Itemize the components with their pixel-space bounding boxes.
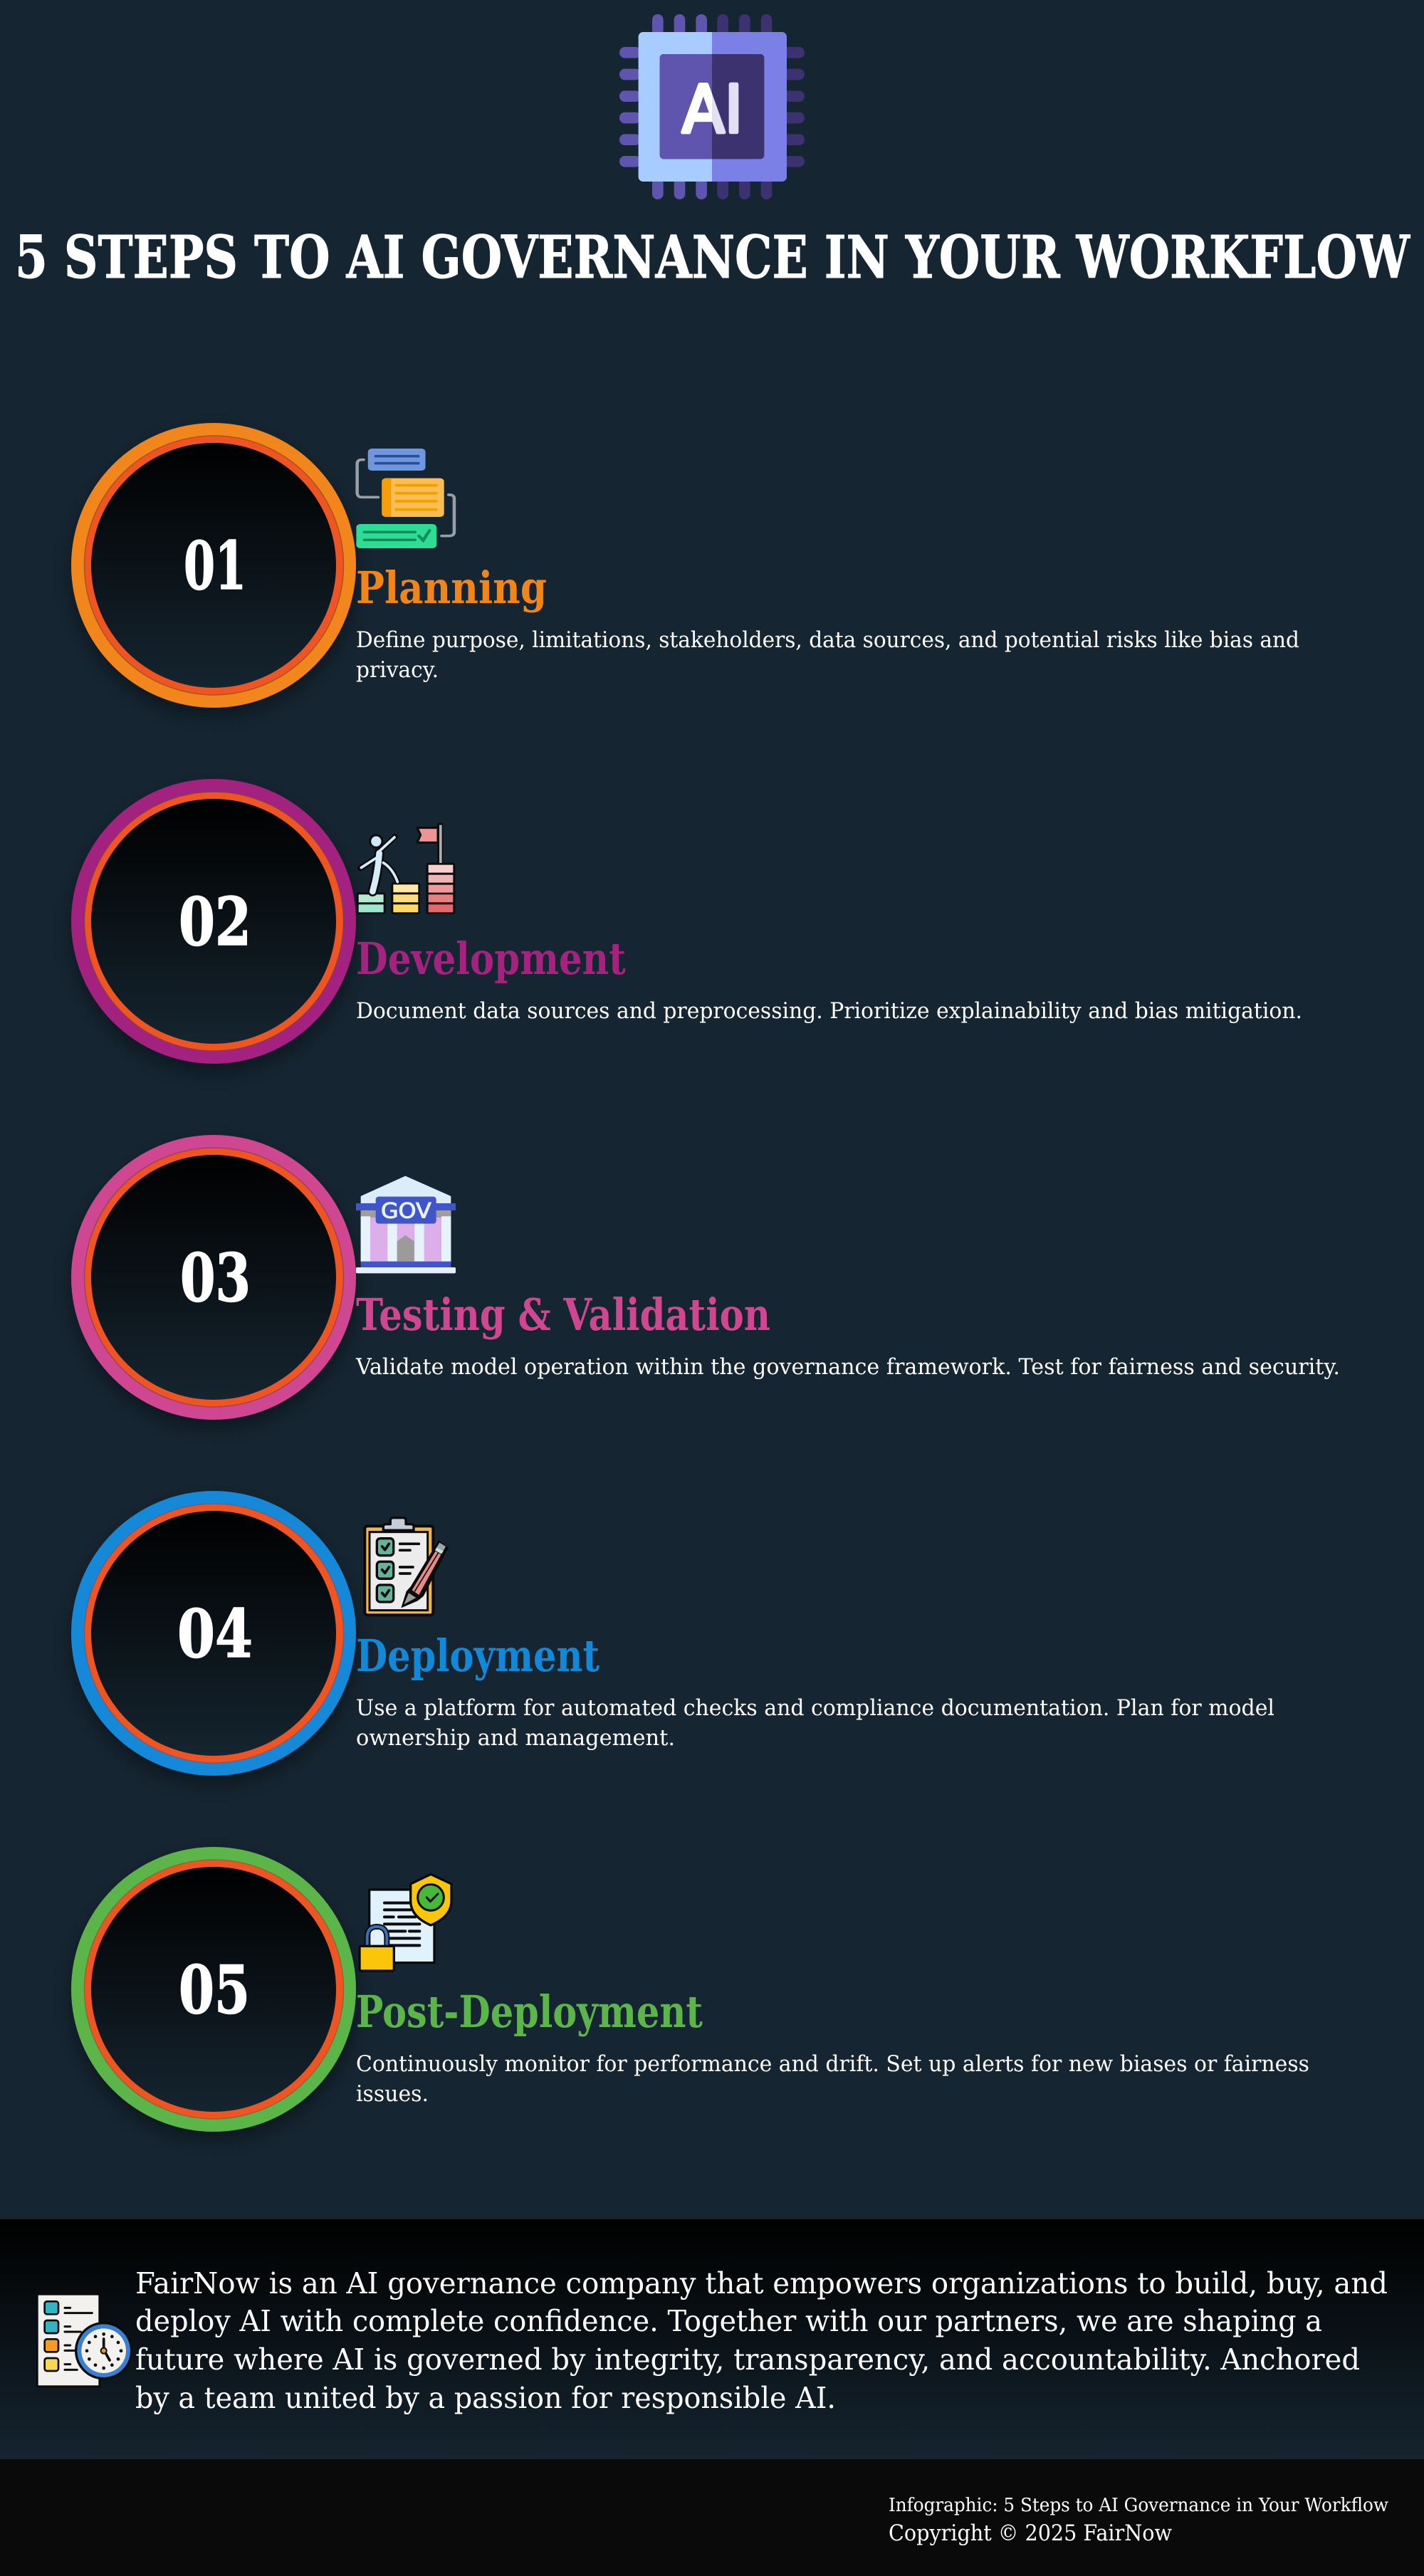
- copyright: Copyright © 2025 FairNow: [889, 2520, 1172, 2546]
- step 4: deployment: [71, 1491, 1274, 1776]
- number badge 02: 02: [179, 883, 251, 960]
- step 5: post-deployment: [71, 1847, 1309, 2132]
- icon: AI chip: [619, 14, 805, 199]
- icon: government building: GOV: [381, 1199, 431, 1223]
- heading: testing and validation: Testing & Validation: [356, 1289, 770, 1341]
- description: post-deployment: [356, 2051, 1309, 2107]
- description: planning: Define purpose, limitations, stakeholders, data sources, and potential risks like bias and: [356, 627, 1299, 653]
- number badge 03: 03: [180, 1239, 251, 1316]
- about text: [135, 2266, 1388, 2415]
- about text: FairNow is an AI governance company that empowers organizations to build, buy, and: [135, 2266, 1388, 2300]
- about text: deploy AI with complete confidence. Together with our partners, we are shaping a: [135, 2304, 1322, 2338]
- description: deployment: Use a platform for automated checks and compliance documentation. Plan for model: [356, 1695, 1274, 1721]
- icon: workflow cards: [356, 449, 454, 548]
- number badge 05: 05: [179, 1951, 250, 2028]
- heading: post-deployment: Post-Deployment: [356, 1986, 703, 2038]
- step 1: planning: [71, 423, 1299, 708]
- step 2: development: [71, 779, 1302, 1064]
- description: planning: privacy.: [356, 657, 439, 683]
- number badge 04: 04: [177, 1595, 253, 1672]
- about text: by a team united by a passion for responsible AI.: [135, 2381, 836, 2415]
- description: planning: [356, 627, 1299, 683]
- heading: deployment: Deployment: [356, 1630, 600, 1682]
- icon: AI chip: AI: [682, 71, 743, 147]
- description: testing and validation: Validate model operation within the governance framework. Test for fairness and security.: [355, 1354, 1340, 1380]
- number badge 01: [71, 423, 356, 708]
- description: deployment: ownership and management.: [356, 1725, 675, 1751]
- description: development: Document data sources and preprocessing. Prioritize explainability and bias mitigation.: [356, 998, 1302, 1024]
- number badge 03: [71, 1135, 356, 1420]
- icon: clipboard checklist: [365, 1518, 449, 1615]
- panel: about FairNow: [0, 2216, 1424, 2459]
- number badge 04: [71, 1491, 356, 1776]
- description: post-deployment: Continuously monitor for performance and drift. Set up alerts for new biases or fairness: [356, 2051, 1309, 2077]
- step 3: testing and validation: [71, 1135, 1340, 1420]
- icon: document, shield and lock: [360, 1874, 451, 1971]
- description: deployment: [356, 1695, 1274, 1751]
- source credit: Infographic: 5 Steps to AI Governance in Your Workflow: [889, 2495, 1388, 2516]
- icon: checklist with clock: [37, 2294, 132, 2387]
- heading: planning: Planning: [356, 562, 547, 614]
- number badge 01: 01: [184, 527, 246, 604]
- icon: government building: [356, 1176, 456, 1273]
- about text: future where AI is governed by integrity, transparency, and accountability. Anchored: [135, 2342, 1360, 2377]
- heading: development: Development: [356, 933, 626, 985]
- footer: [0, 2459, 1424, 2576]
- number badge 02: [71, 779, 356, 1064]
- icon: climbing steps to flag: [357, 823, 455, 914]
- number badge 05: [71, 1847, 356, 2132]
- description: post-deployment: issues.: [356, 2081, 429, 2107]
